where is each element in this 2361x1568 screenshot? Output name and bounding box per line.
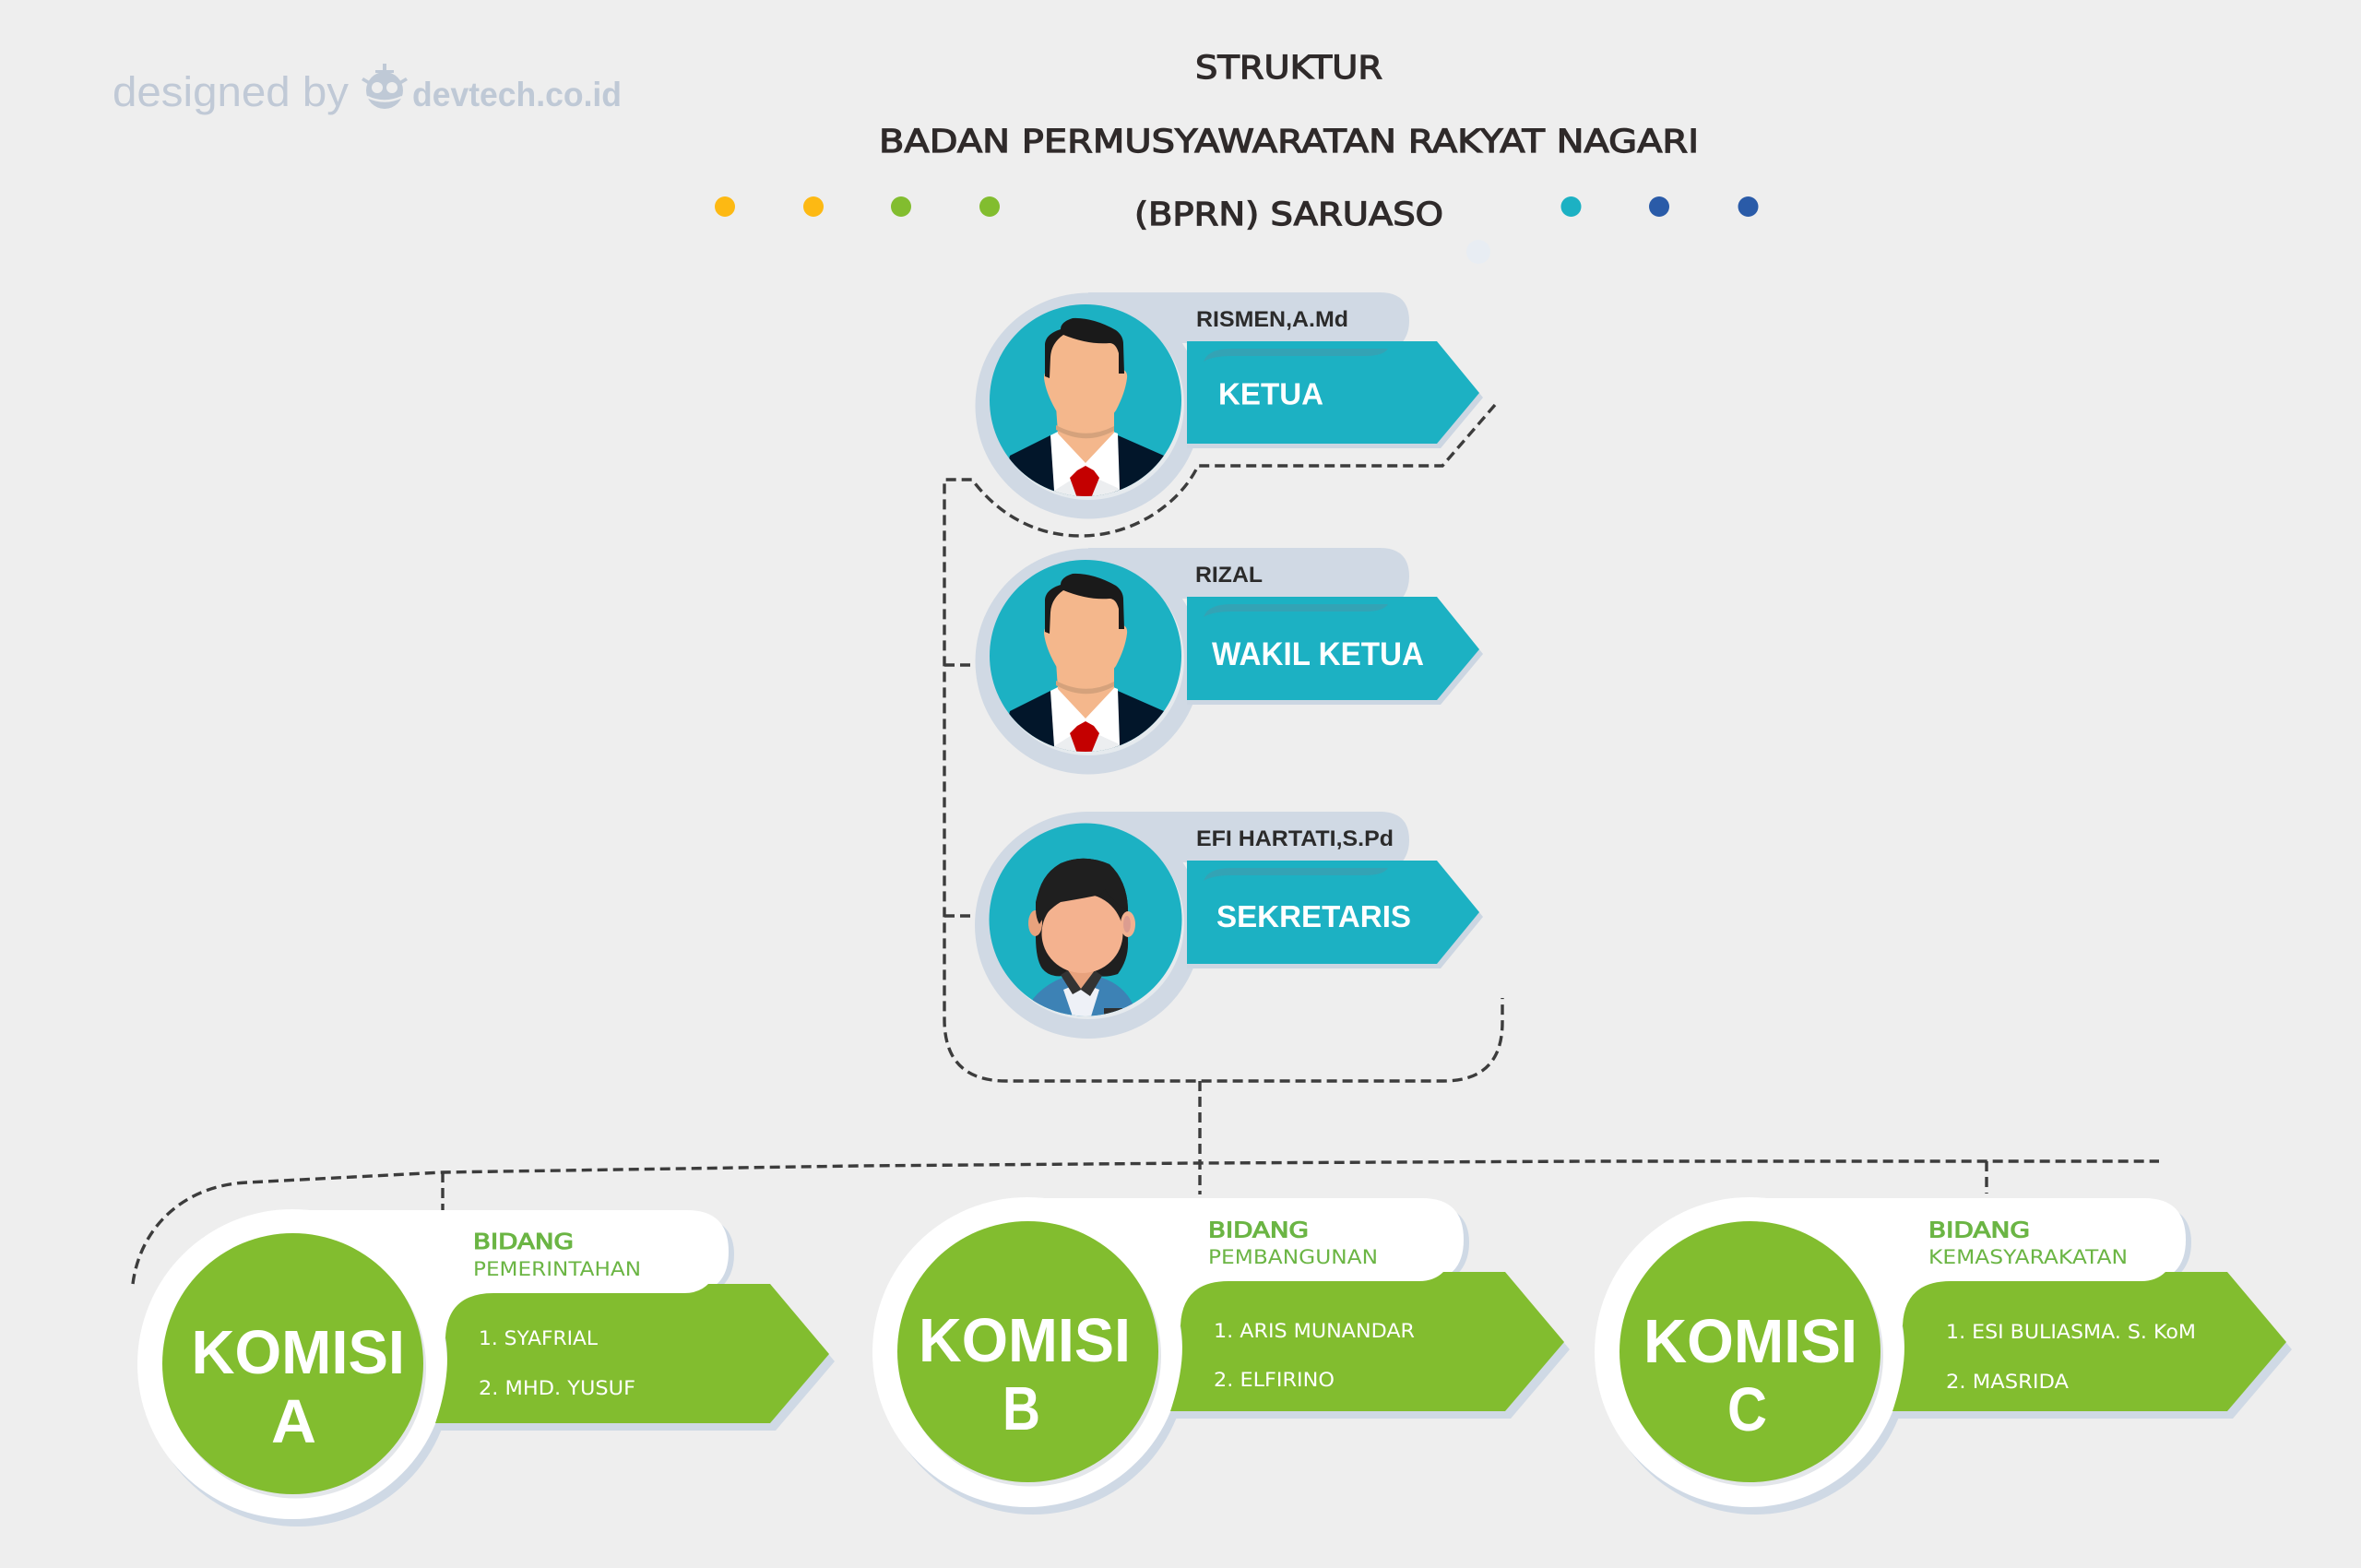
panel: sekretaris: SEKRETARIS xyxy=(1216,899,1411,933)
connector: vertical trunk xyxy=(1198,1081,1202,1194)
panel: sekretaris xyxy=(975,812,1483,1039)
connector: leadership bracket xyxy=(944,405,1502,1081)
text: anggota komisi B xyxy=(1214,1320,1415,1391)
text: bidang pembangunan xyxy=(1208,1219,1378,1268)
panel: komisi B: B xyxy=(1003,1374,1040,1443)
name: ketua: RISMEN,A.Md xyxy=(1196,307,1348,332)
text: komisi C: KOMISI xyxy=(1643,1307,1857,1376)
avatar: wakil ketua xyxy=(990,560,1184,772)
connector: sekretaris branch xyxy=(944,914,976,918)
text: anggota komisi C xyxy=(1946,1321,2196,1393)
icon: robot logo xyxy=(362,64,408,109)
title xyxy=(879,50,1699,233)
avatar: sekretaris xyxy=(989,823,1184,1028)
text: anggota komisi B: 2. ELFIRINO xyxy=(1214,1369,1335,1391)
connector: wakil ketua branch xyxy=(944,663,975,667)
text: bidang pemerintahan: BIDANG xyxy=(473,1230,574,1254)
title: STRUKTUR xyxy=(1195,50,1382,87)
ribbon: wakil ketua xyxy=(1187,597,1479,700)
text: anggota komisi A xyxy=(479,1327,635,1399)
panel: komisi C: C xyxy=(1727,1375,1767,1444)
avatar: ketua xyxy=(990,304,1184,517)
text: bidang pembangunan: BIDANG xyxy=(1208,1219,1309,1243)
panel: komisi A xyxy=(137,1209,835,1526)
title: BADAN PERMUSYAWARATAN RAKYAT NAGARI xyxy=(879,124,1699,160)
connector: komisi horizontal line xyxy=(133,1161,2159,1284)
text: anggota komisi A: 2. MHD. YUSUF xyxy=(479,1377,635,1399)
text: anggota komisi C: 1. ESI BULIASMA. S. KoM xyxy=(1946,1321,2196,1343)
panel: komisi A: A xyxy=(271,1387,316,1456)
text: anggota komisi B: 1. ARIS MUNANDAR xyxy=(1214,1320,1415,1342)
text: komisi A: KOMISI xyxy=(192,1318,405,1387)
text: anggota komisi C: 2. MASRIDA xyxy=(1946,1371,2070,1393)
panel: wakil ketua xyxy=(976,548,1483,775)
panel: komisi B xyxy=(872,1197,1570,1515)
panel: ketua: KETUA xyxy=(1218,376,1323,411)
text: bidang pemerintahan: PEMERINTAHAN xyxy=(473,1258,641,1280)
watermark: designed by devtech.co.id xyxy=(113,64,622,115)
text: bidang pembangunan: PEMBANGUNAN xyxy=(1208,1246,1378,1268)
text: komisi B: KOMISI xyxy=(919,1306,1131,1375)
ribbon: ketua xyxy=(1187,341,1479,444)
text: bidang pemerintahan xyxy=(473,1230,641,1280)
text: anggota komisi A: 1. SYAFRIAL xyxy=(479,1327,598,1349)
name: wakil ketua: RIZAL xyxy=(1195,563,1263,588)
ribbon: sekretaris xyxy=(1187,861,1479,964)
panel: wakil ketua: WAKIL KETUA xyxy=(1212,636,1424,672)
text: bidang kemasyarakatan: BIDANG xyxy=(1928,1219,2030,1243)
connector: komisi A drop xyxy=(441,1172,445,1210)
connector: komisi C drop xyxy=(1985,1161,1988,1194)
watermark: designed by devtech.co.id: designed by xyxy=(113,68,350,115)
watermark: designed by devtech.co.id: devtech.co.id xyxy=(412,76,622,113)
title: (BPRN) SARUASO xyxy=(1134,196,1443,233)
decorative coloured dots xyxy=(715,196,1758,264)
panel: komisi C xyxy=(1595,1197,2292,1515)
name: sekretaris: EFI HARTATI,S.Pd xyxy=(1196,826,1394,851)
text: bidang kemasyarakatan: KEMASYARAKATAN xyxy=(1928,1246,2128,1268)
panel: ketua xyxy=(976,292,1483,518)
text: bidang kemasyarakatan xyxy=(1928,1219,2128,1268)
